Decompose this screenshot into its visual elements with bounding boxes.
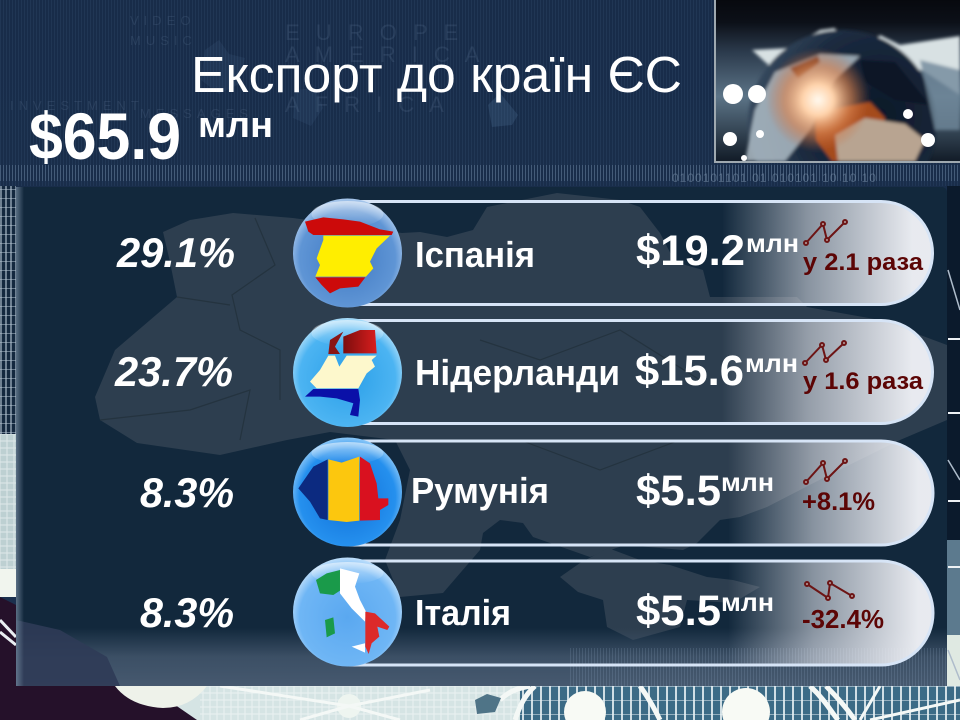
change: у 2.1 раза bbox=[803, 249, 924, 276]
background: INVESTMENT bbox=[10, 98, 144, 113]
map: Crimea bbox=[560, 548, 760, 640]
row: Spain bbox=[116, 198, 933, 308]
value bbox=[635, 347, 798, 395]
icon: trend down bbox=[805, 581, 854, 600]
country name: Нідерланди bbox=[415, 352, 620, 393]
country name: Іспанія bbox=[415, 234, 535, 275]
share: 23.7% bbox=[114, 348, 233, 395]
value: $15.6 bbox=[635, 347, 744, 395]
total value: млн bbox=[198, 104, 273, 145]
total value: $65.9 bbox=[29, 99, 181, 173]
side band left bbox=[0, 186, 16, 720]
value: млн bbox=[721, 589, 774, 617]
icon: trend up bbox=[804, 459, 847, 484]
share: 8.3% bbox=[140, 589, 234, 636]
share: 8.3% bbox=[140, 469, 234, 516]
change: -32.4% bbox=[802, 604, 884, 634]
bottom network background bbox=[0, 610, 960, 720]
pill bbox=[350, 441, 933, 545]
country name: Румунія bbox=[411, 470, 549, 511]
share: 29.1% bbox=[116, 229, 235, 276]
pill bbox=[350, 561, 933, 665]
icon: Netherlands flag map bbox=[293, 318, 402, 427]
value: $5.5 bbox=[636, 467, 721, 515]
background: 0100101101 01 010101 10 10 10 bbox=[672, 171, 877, 185]
panel lower lighter band bbox=[16, 628, 947, 686]
change: у 1.6 раза bbox=[803, 368, 924, 395]
background: MUSIC bbox=[130, 33, 197, 48]
icon: Spain flag map bbox=[293, 198, 402, 308]
pill bbox=[350, 202, 932, 304]
background: E U R O P E bbox=[285, 20, 463, 45]
icon: Romania flag map bbox=[293, 438, 402, 546]
value: млн bbox=[721, 469, 774, 497]
map: region borders bbox=[100, 218, 700, 470]
total value bbox=[29, 99, 273, 173]
panel: lower left tint bbox=[16, 620, 120, 686]
value: $19.2 bbox=[636, 227, 745, 275]
value: $5.5 bbox=[636, 587, 721, 635]
title: Експорт до країн ЄС bbox=[191, 46, 682, 103]
value bbox=[636, 227, 799, 275]
value bbox=[636, 467, 774, 515]
map of Ukraine silhouette bbox=[95, 193, 947, 597]
side band right bbox=[947, 186, 960, 686]
panel: main dark panel with Ukraine map bbox=[16, 187, 947, 686]
icon: Italy flag map bbox=[293, 558, 402, 666]
row: Netherlands bbox=[114, 318, 933, 427]
background: MESSAGES bbox=[140, 106, 253, 121]
photo: globe network bbox=[714, 0, 960, 163]
background: VIDEO bbox=[130, 13, 195, 28]
panel: lower right grid bbox=[570, 648, 947, 686]
background: A F R I C A bbox=[285, 92, 449, 117]
panel: left soft edge bbox=[16, 187, 24, 686]
country name: Італія bbox=[415, 592, 511, 633]
value bbox=[636, 587, 774, 635]
value: млн bbox=[745, 350, 798, 378]
icon: trend up bbox=[804, 220, 847, 245]
value: млн bbox=[746, 230, 799, 258]
background: A M E R I C A bbox=[285, 42, 484, 67]
row: Romania bbox=[140, 438, 933, 546]
icon: trend up bbox=[803, 341, 846, 365]
row: Italy bbox=[140, 558, 933, 666]
change: +8.1% bbox=[802, 488, 875, 516]
pill bbox=[350, 320, 932, 424]
